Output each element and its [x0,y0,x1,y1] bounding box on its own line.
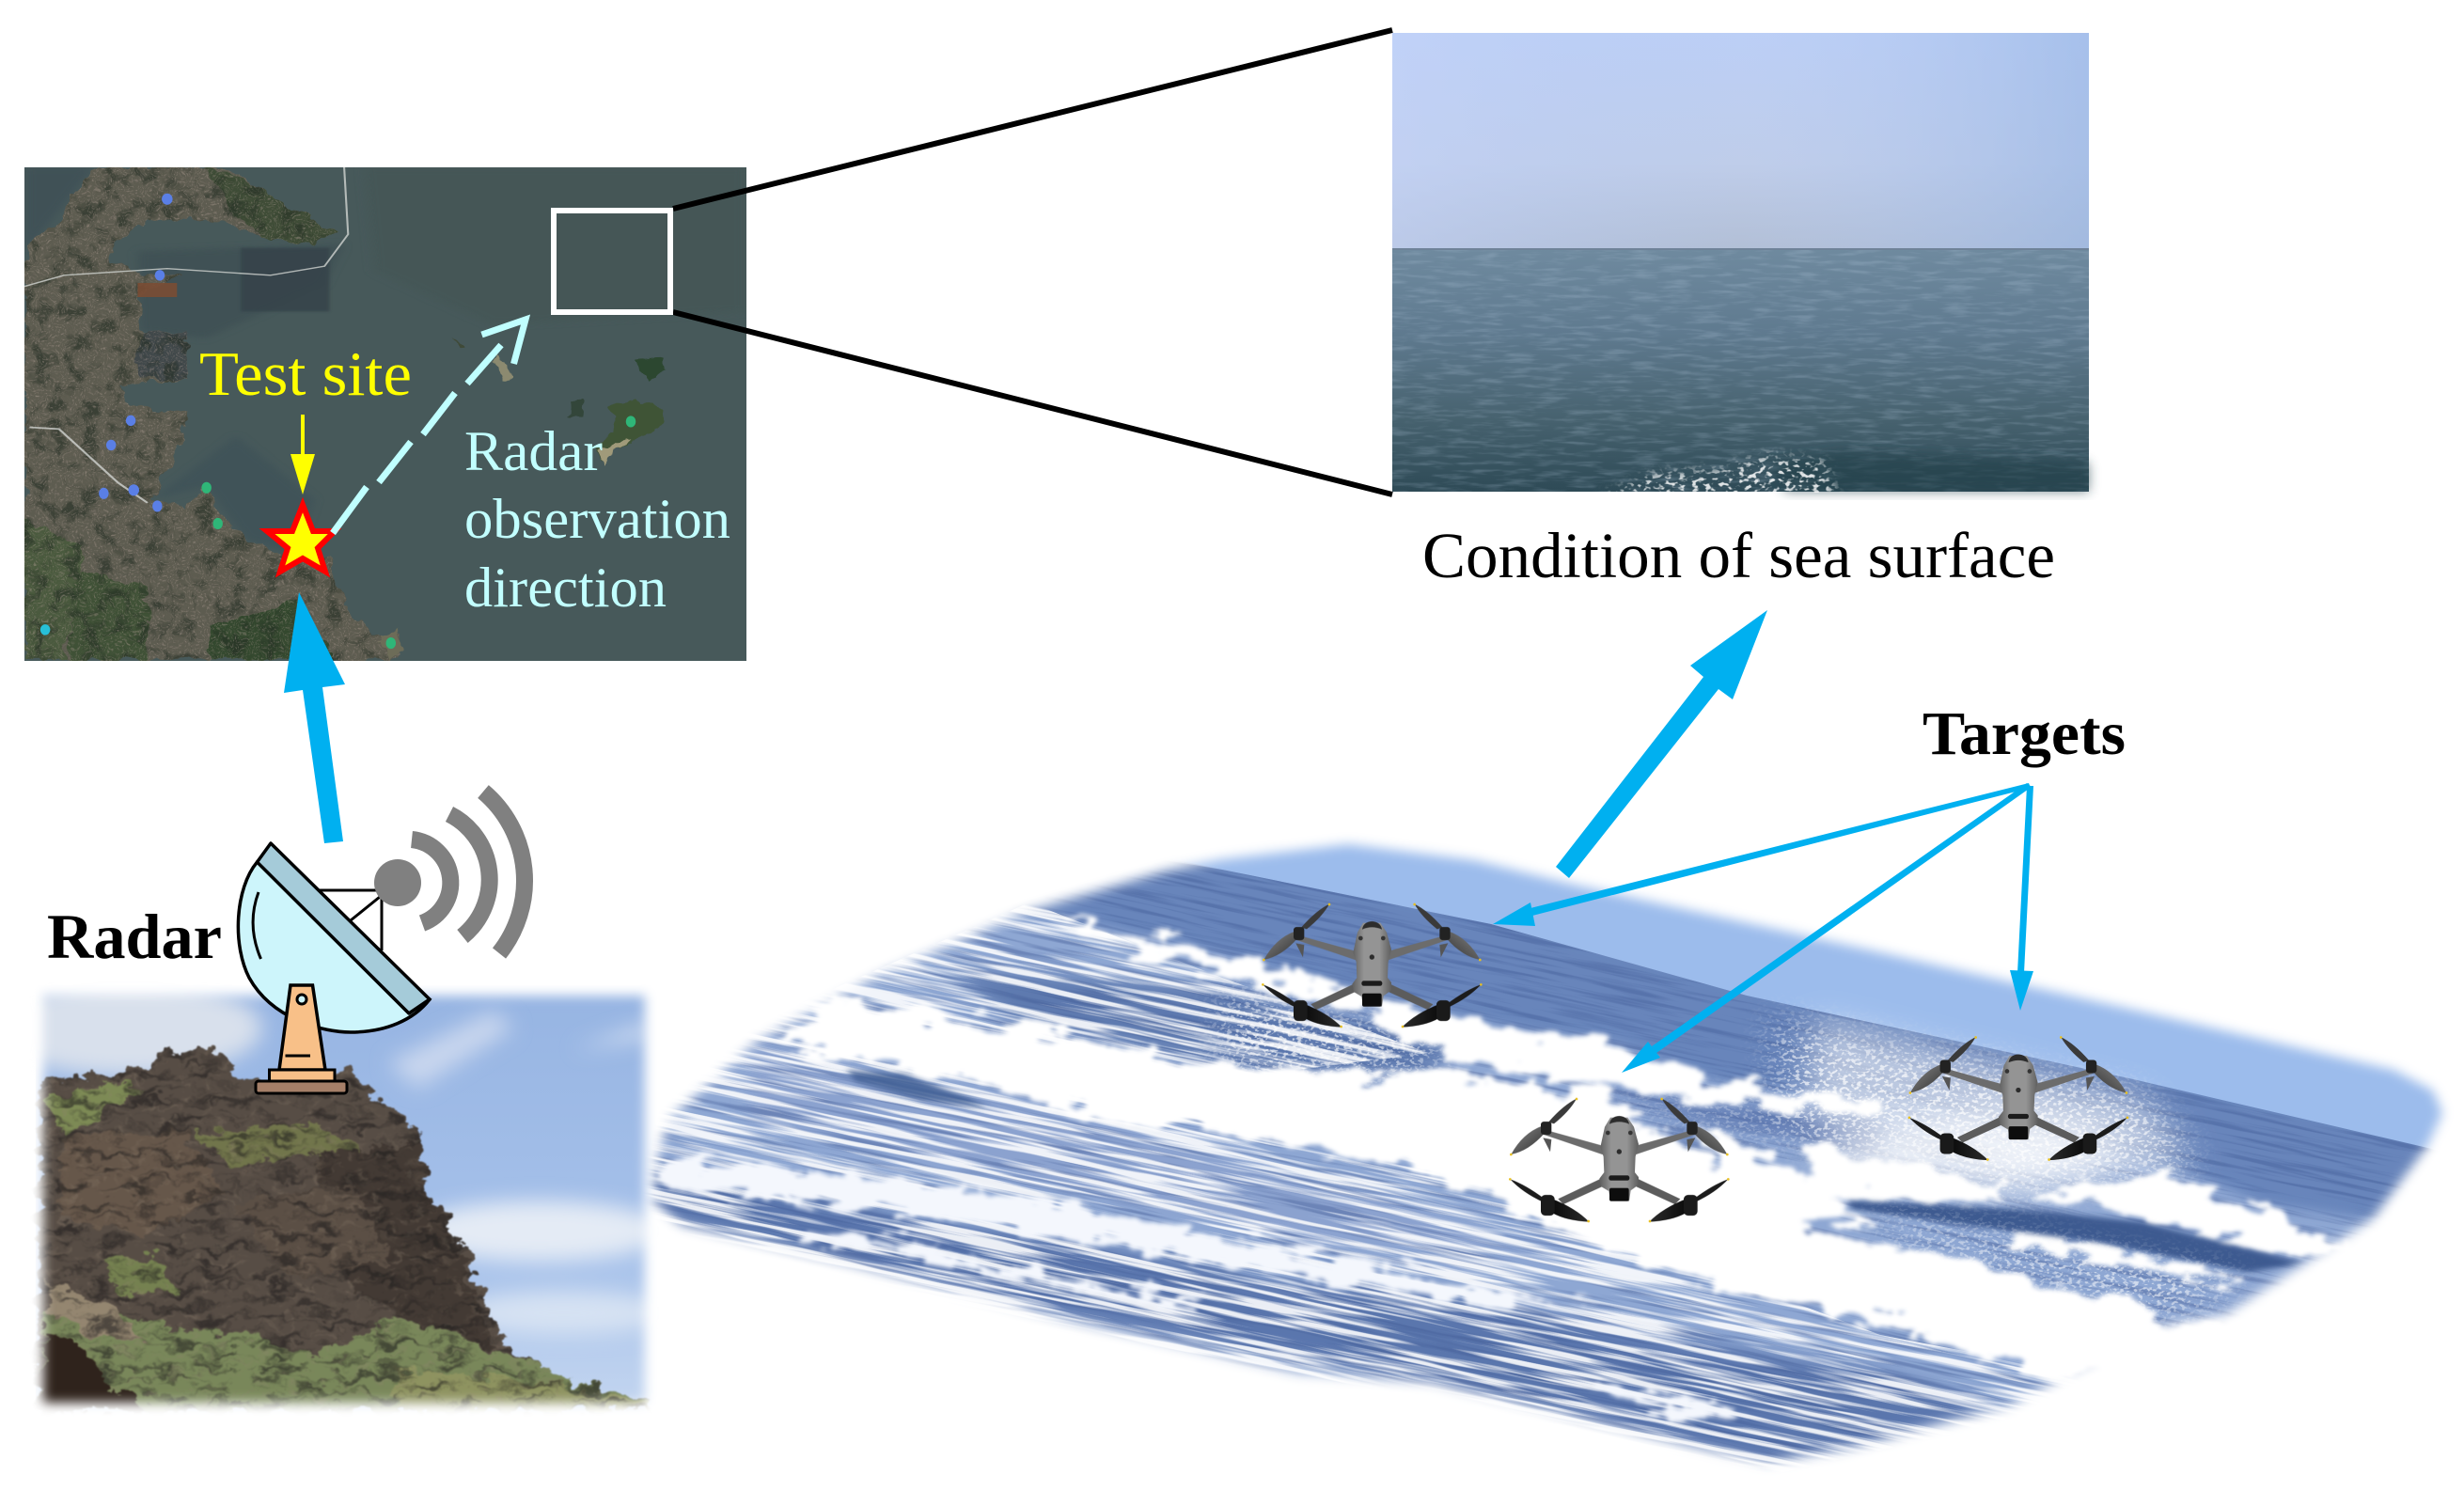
arrow: radar to map [284,592,345,843]
zoom line: lower connector from white box to sea photo [673,312,1392,494]
photo sky [1392,33,2089,250]
cliff rock [36,1037,657,1417]
sky clouds [0,981,669,1335]
white water streak texture [1410,1128,1411,1129]
zoom line: upper connector from white box to sea photo [673,30,1392,209]
caption: condition of sea surface: Condition of sea surface [1422,520,2055,591]
icon: drone one [1262,903,1483,1028]
icon: drone two [1509,1098,1730,1222]
icon: radar dish [238,792,525,1093]
arrow: waves to sea condition caption [1556,610,1767,878]
ocean dark bands [651,968,2002,1467]
icon: drone three [1908,1036,2128,1161]
arrow: dashed radar observation direction [333,320,526,533]
grass patches [44,1080,145,1137]
spray speckle [1128,846,2464,1491]
dish bowl [238,862,430,1032]
map coastal and land imagery [24,167,666,661]
dish rim [258,843,430,1013]
label: radar observation direction: Radar [464,420,603,482]
arrow: targets to drone one [1493,783,2031,926]
foam crest and main foam [769,911,2350,1381]
panel: photo of sea surface condition [1392,33,2089,493]
panel: rocky cliff photo [0,981,669,1417]
dish stand [279,985,325,1070]
ocean sky band [1192,842,2442,1148]
cliff sky [36,985,657,1417]
map sea [24,167,746,661]
label: radar observation direction: observation [464,488,730,550]
label: radar observation direction: direction [464,557,667,619]
label: Radar: Radar [47,901,222,972]
arrow: targets to drone three [2010,786,2033,1011]
spray haze around drone three [1806,1020,2190,1194]
signal waves [412,792,525,953]
panel: satellite map of test site [20,164,746,664]
label: Test site: Test site [199,339,412,409]
dark wave troughs [846,1070,2305,1272]
label: radar observation direction [464,420,730,619]
panel: ocean with waves [647,837,2448,1470]
ocean base [648,860,2378,1466]
feed mount [319,890,382,950]
far sea [1027,863,2430,1221]
label: Targets: Targets [1923,699,2126,768]
white selection box on map [554,211,670,312]
photo sea [1392,248,2089,492]
arrow: yellow pointer to test site [290,415,315,494]
feed horn circle [374,859,421,906]
icon: test site star [267,505,335,572]
dark water streak texture [1410,1128,1411,1129]
arrow: targets to drone two [1622,783,2032,1073]
secondary foam bands [665,1159,1749,1415]
